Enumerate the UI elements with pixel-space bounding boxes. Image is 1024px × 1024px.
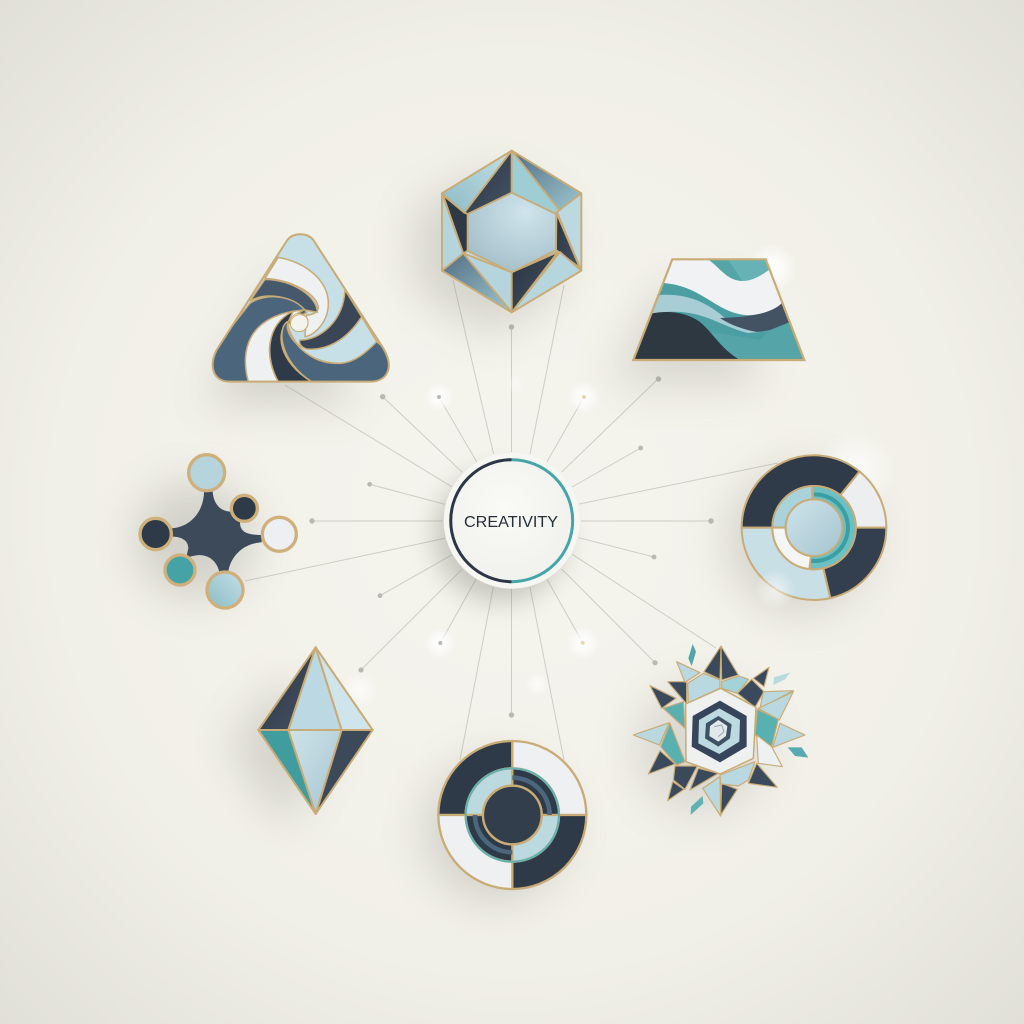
center disc — [451, 460, 573, 582]
icon: split ring bottom — [423, 741, 586, 902]
icon: diamond — [228, 647, 378, 828]
icon: wave trapezoid — [608, 244, 810, 385]
icon: molecule node — [135, 455, 296, 608]
icon: shattered star — [633, 644, 808, 816]
icon: hexagonal gem — [415, 151, 581, 335]
connector lines and dots — [245, 280, 778, 760]
center node — [434, 453, 580, 602]
icon: swirl triangle — [205, 234, 397, 403]
title: CREATIVITY — [464, 514, 558, 531]
ring: teal half — [512, 460, 573, 582]
ring: dark half — [451, 460, 512, 582]
icon: split ring right — [726, 432, 895, 612]
